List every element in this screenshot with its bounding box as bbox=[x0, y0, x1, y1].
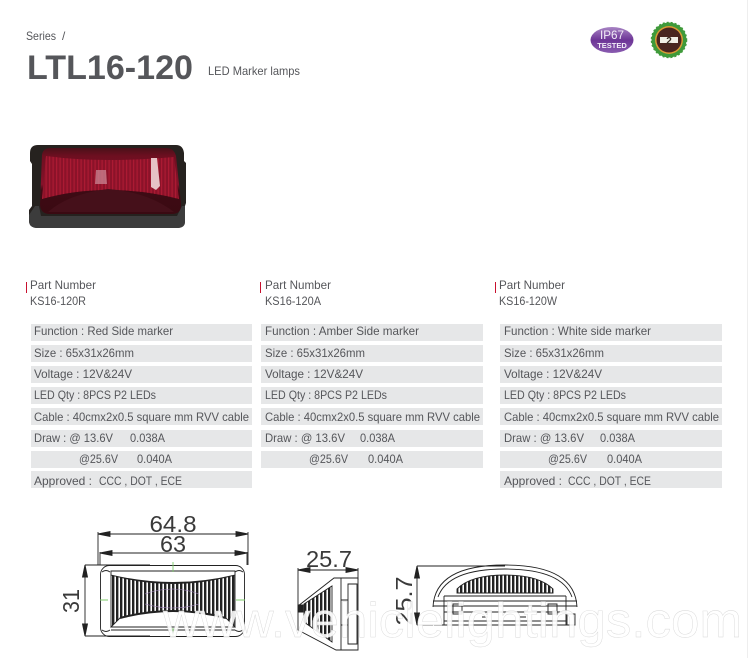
spec rows: LED Qty : 8PCS P2 LEDs bbox=[265, 388, 387, 402]
dimension: side depth: 25.7 bbox=[306, 546, 352, 572]
part number heading bbox=[495, 278, 565, 308]
spec rows: @25.6V bbox=[548, 452, 587, 466]
spec rows: Cable : 40cmx2x0.5 square mm RVV cable bbox=[504, 410, 719, 424]
technical drawing: front view bbox=[82, 532, 248, 636]
page edge line bbox=[747, 0, 748, 658]
spec rows: @25.6V bbox=[309, 452, 348, 466]
spec rows: Draw : @ 13.6V bbox=[265, 431, 345, 445]
spec rows: LED Qty : 8PCS P2 LEDs bbox=[34, 388, 156, 402]
part number heading: Part Number bbox=[30, 278, 96, 292]
spec rows bbox=[500, 324, 722, 488]
series label: Series bbox=[26, 29, 56, 43]
spec rows: 0.038A bbox=[130, 431, 165, 445]
title: LTL16-120 bbox=[27, 49, 193, 87]
badge: IP67 tested bbox=[590, 27, 634, 53]
spec rows: 0.040A bbox=[607, 452, 642, 466]
spec rows: 0.040A bbox=[368, 452, 403, 466]
subtitle: LED Marker lamps bbox=[208, 64, 300, 78]
spec rows: CCC , DOT , ECE bbox=[568, 474, 651, 488]
series label: / bbox=[62, 29, 66, 43]
spec rows: Size : 65x31x26mm bbox=[504, 346, 604, 360]
spec rows: Function : Red Side marker bbox=[34, 324, 173, 338]
spec rows: Size : 65x31x26mm bbox=[34, 346, 134, 360]
spec rows: Voltage : 12V&24V bbox=[265, 367, 363, 381]
product photo: red marker lamp bbox=[29, 145, 186, 228]
part number heading: Part Number bbox=[265, 278, 331, 292]
part number heading: KS16-120A bbox=[265, 294, 321, 308]
column: white bbox=[495, 278, 722, 488]
column: red bbox=[26, 278, 252, 488]
spec rows: Voltage : 12V&24V bbox=[504, 367, 602, 381]
spec rows: @25.6V bbox=[79, 452, 118, 466]
badge: IP67 tested: TESTED bbox=[597, 41, 627, 50]
part number heading: KS16-120W bbox=[499, 294, 558, 308]
spec rows: CCC , DOT , ECE bbox=[99, 474, 182, 488]
column: amber bbox=[260, 278, 483, 468]
watermark: www.vehiclelightings.com bbox=[162, 594, 742, 648]
technical drawing: side view bbox=[298, 568, 358, 650]
part number heading: KS16-120R bbox=[30, 294, 86, 308]
badge: IP67 tested: IP67 bbox=[600, 30, 624, 42]
spec rows: Voltage : 12V&24V bbox=[34, 367, 132, 381]
dimension: inner width: 63 bbox=[160, 531, 186, 557]
spec rows bbox=[31, 324, 252, 488]
spec rows: 0.040A bbox=[137, 452, 172, 466]
part number heading bbox=[260, 278, 331, 308]
spec rows: LED Qty : 8PCS P2 LEDs bbox=[504, 388, 626, 402]
spec rows: Approved : bbox=[504, 474, 562, 488]
spec rows: Cable : 40cmx2x0.5 square mm RVV cable bbox=[34, 410, 249, 424]
part number heading: Part Number bbox=[499, 278, 565, 292]
part number heading bbox=[26, 278, 96, 308]
spec rows: Approved : bbox=[34, 474, 92, 488]
spec rows: Draw : @ 13.6V bbox=[34, 431, 113, 445]
spec rows: 0.038A bbox=[600, 431, 635, 445]
technical drawing: rear view bbox=[414, 565, 577, 625]
dimension: rear height: 25.7 bbox=[391, 577, 417, 625]
dimension: height: 31 bbox=[58, 589, 84, 613]
spec rows: Cable : 40cmx2x0.5 square mm RVV cable bbox=[265, 410, 480, 424]
spec rows bbox=[261, 324, 483, 468]
badge: 2 year warranty: 2 bbox=[666, 36, 672, 47]
spec rows: 0.038A bbox=[360, 431, 395, 445]
spec rows: Size : 65x31x26mm bbox=[265, 346, 365, 360]
badge: 2 year warranty bbox=[652, 22, 686, 58]
spec rows: Function : White side marker bbox=[504, 324, 651, 338]
spec rows: Draw : @ 13.6V bbox=[504, 431, 584, 445]
spec rows: Function : Amber Side marker bbox=[265, 324, 419, 338]
dimension: overall width: 64.8 bbox=[150, 511, 196, 537]
